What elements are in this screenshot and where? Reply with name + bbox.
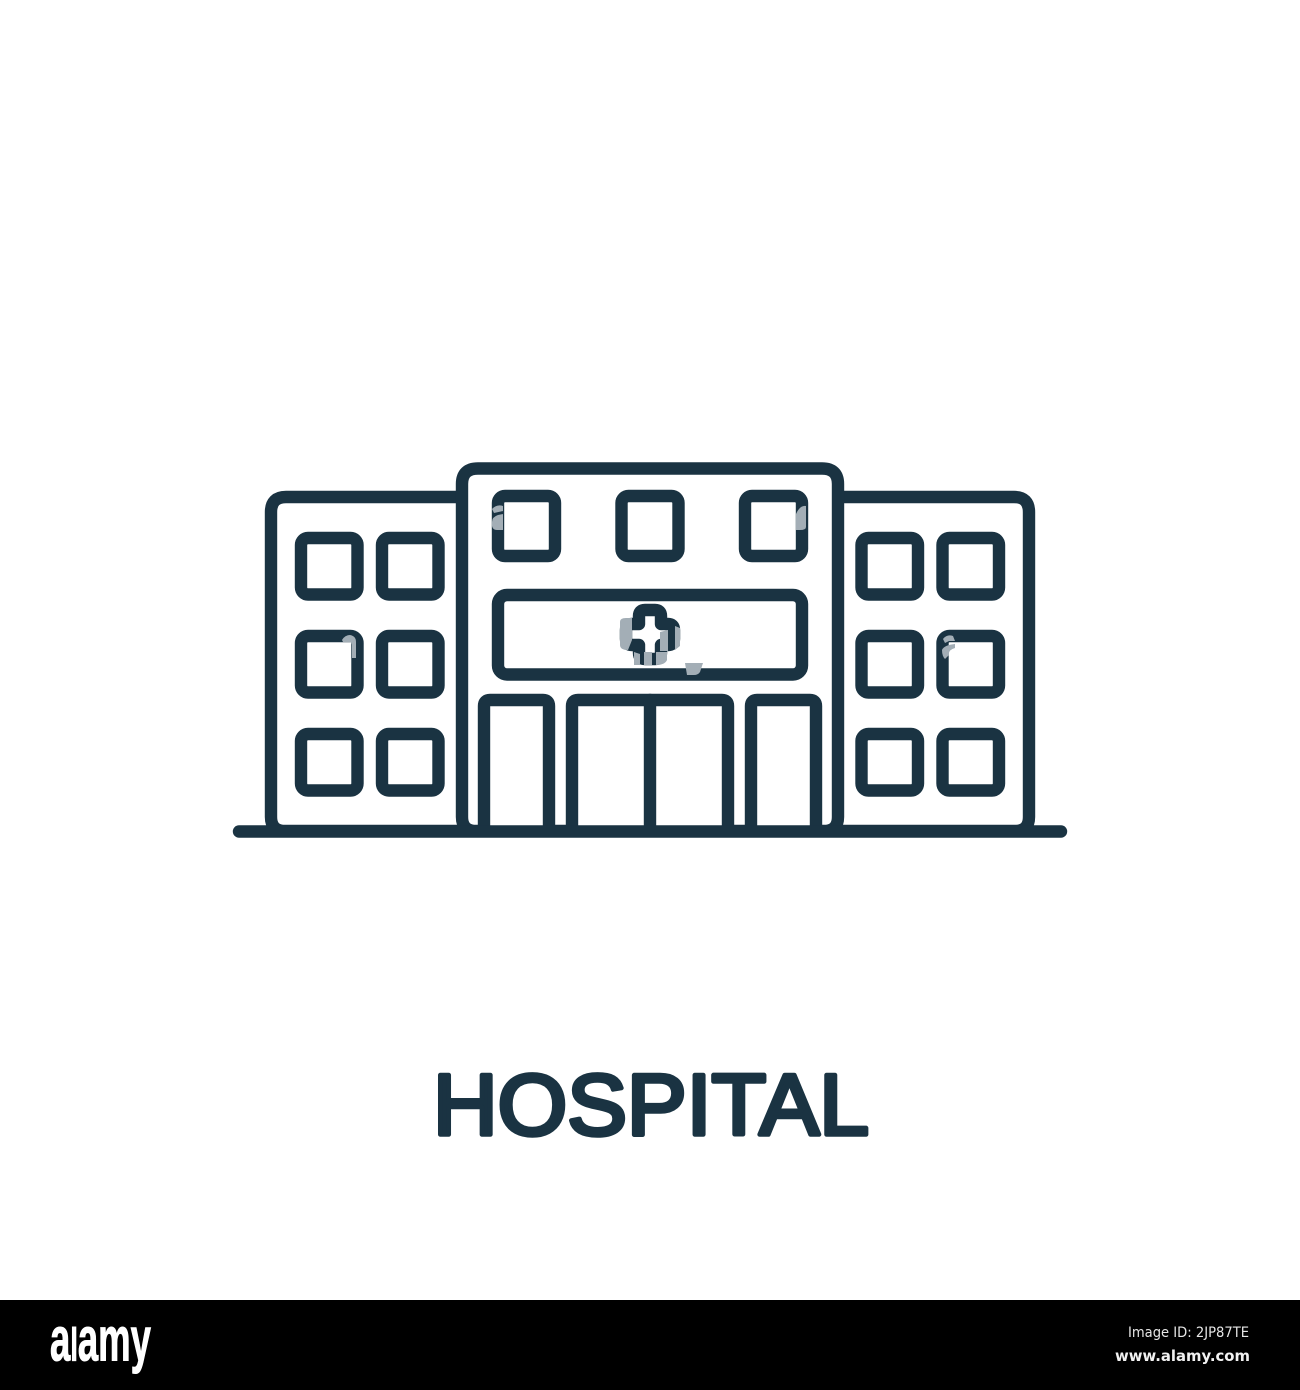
ground line xyxy=(239,825,1061,838)
image id: Image ID: 2JP87TE xyxy=(1128,1325,1249,1341)
title: HOSPITAL: HOSPITAL xyxy=(433,1058,869,1154)
central block xyxy=(462,468,838,831)
watermark fragments xyxy=(342,505,955,675)
medical cross sign xyxy=(626,610,674,659)
footer bar xyxy=(0,1300,1300,1390)
right wing xyxy=(838,497,1029,831)
website: www.alamy.com xyxy=(1115,1347,1250,1365)
logo: alamy: alamy xyxy=(50,1306,151,1374)
entrance doors xyxy=(484,700,816,831)
hospital building icon xyxy=(239,468,1061,832)
left wing xyxy=(271,497,462,831)
